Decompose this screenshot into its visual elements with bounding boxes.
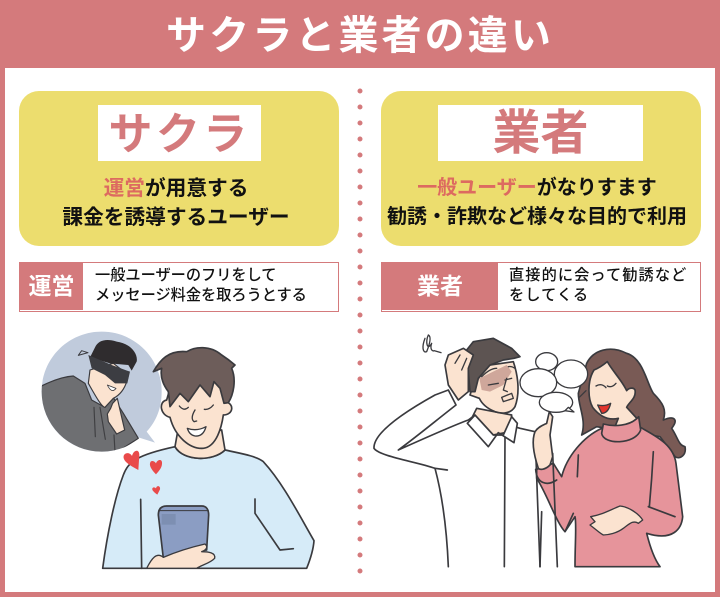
title: サクラと業者の違い [166, 14, 554, 58]
text: sakura description [62, 177, 290, 229]
text: vendor note: をしてくる [509, 287, 589, 304]
text: sakura description: 運営が用意する [104, 177, 248, 200]
icon: hand [147, 544, 215, 568]
label: operator: 運営 [28, 273, 74, 299]
icon: man body white shirt [374, 390, 540, 567]
icon: speech bubbles [520, 353, 588, 412]
icon: face shadow [479, 365, 512, 392]
label: operator [20, 263, 83, 310]
heading: sakura: サクラ [109, 110, 250, 159]
heading: gyosha [438, 105, 643, 161]
icon: collar [467, 415, 517, 447]
panel: sakura card [19, 91, 339, 246]
icon: hair [153, 348, 235, 407]
icon: shirt [103, 447, 314, 568]
heading: gyosha: 業者 [492, 107, 588, 160]
illustration: man with phone and masked figure [42, 332, 315, 570]
illustration: troubled man and woman with speech bubbles [373, 334, 686, 568]
icon: man neck [470, 408, 512, 435]
panel: gyosha note [381, 262, 701, 312]
icon: thought bubble with masked figure [40, 332, 162, 454]
panel: gyosha card [381, 91, 701, 246]
icon: raised finger hand [533, 412, 553, 469]
text: vendor note [509, 266, 687, 304]
panel: sakura note [19, 262, 339, 312]
icon: scribble [423, 335, 441, 353]
text: gyosha description [387, 176, 687, 228]
icon: woman pink sweater [537, 427, 683, 567]
label: vendor [382, 263, 498, 310]
text: sakura description: 課金を誘導するユーザー [62, 206, 290, 229]
text: gyosha description: 一般ユーザーがなりすます [417, 177, 657, 199]
text: operator note: 一般ユーザーのフリをして [95, 267, 276, 284]
center dotted divider [358, 88, 362, 574]
icon: woman face [589, 362, 638, 430]
icon: face and neck [175, 430, 225, 458]
icon: hearts [124, 451, 162, 495]
icon: man hair [467, 338, 520, 392]
icon: man hand on head [445, 348, 473, 400]
text: operator note [95, 266, 307, 304]
label: vendor: 業者 [417, 273, 463, 299]
icon: phone [158, 506, 209, 558]
icon: man head [470, 362, 518, 413]
text: vendor note: 直接的に会って勧誘など [509, 267, 687, 284]
text: gyosha description: 勧誘・詐欺など様々な目的で利用 [387, 206, 687, 228]
icon: woman hair [578, 349, 685, 458]
icon: lower hand [590, 506, 643, 535]
text: operator note: メッセージ料金を取ろうとする [95, 287, 307, 304]
